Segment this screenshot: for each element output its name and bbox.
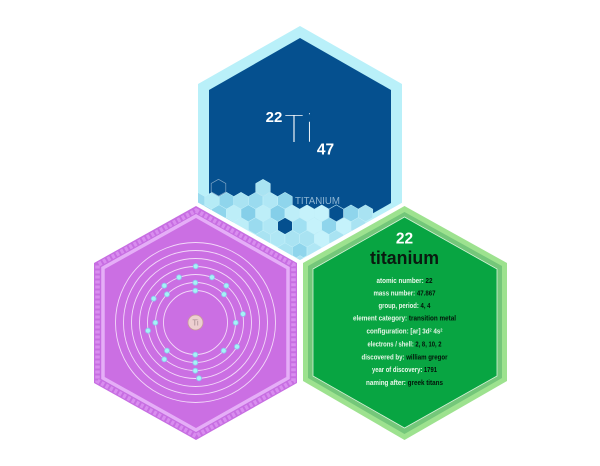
electron shells (116, 242, 276, 402)
fact: element category: element category: transition metal (353, 314, 456, 322)
element name faint: TITANIUM (295, 195, 340, 207)
fact: year of discovery: year of discovery: 1791 (372, 365, 438, 374)
panel: element facts hexagon (303, 206, 507, 440)
nucleus (188, 315, 203, 330)
outlined dark hexagon strokes (329, 205, 344, 222)
fact: electrons per shell: electrons / shell: 2, 8, 10, 2 (368, 340, 442, 348)
atomic number heading: 22 (396, 230, 413, 248)
fact: group and period: group, period: 4, 4 (378, 301, 431, 310)
scalloped border (98, 210, 294, 436)
fact: atomic number: atomic number: 22 (376, 276, 432, 285)
hexagon with white gap (94, 206, 297, 440)
hexagon outer border (198, 26, 402, 264)
hexagon middle border (308, 212, 502, 434)
panel: titanium symbol hexagon (190, 26, 402, 272)
honeycomb pattern (198, 179, 374, 260)
electrons (146, 264, 246, 381)
outlined empty hexagon (211, 179, 226, 196)
fact: configuration: 2 (440, 328, 443, 332)
element symbol: Ti (284, 105, 316, 153)
fact: configuration: 4s (432, 326, 440, 336)
atomic number label: 22 (266, 109, 282, 126)
hexagon dark fill (209, 38, 391, 255)
panel: electron shell diagram hexagon (94, 206, 297, 440)
light inner band (103, 216, 288, 430)
hexagon green fill with white line (313, 217, 497, 428)
fact: mass number: mass number: 47.867 (374, 288, 436, 298)
element name heading: titanium (370, 248, 439, 268)
fact: configuration: 2 (430, 328, 432, 332)
hexagon outer border (303, 206, 507, 440)
fact: configuration: configuration: [ar] 3d (366, 326, 443, 336)
fact: discovered by: discovered by: william gregor (362, 352, 448, 362)
nucleus: Ti (192, 318, 199, 328)
fact: naming after: naming after: greek titans (366, 378, 443, 387)
mass number label: 47 (317, 142, 334, 158)
